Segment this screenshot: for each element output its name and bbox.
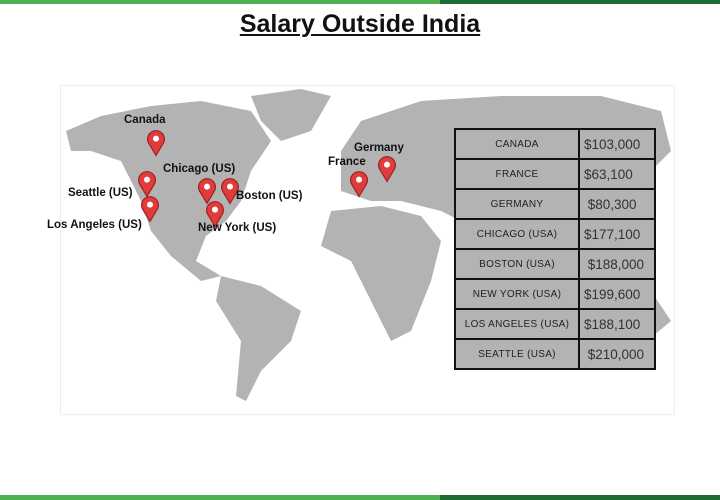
salary table: FRANCE [496, 168, 538, 180]
salary table: $188,000 [588, 256, 644, 272]
salary table: BOSTON (USA) [479, 258, 555, 270]
text: Seattle (US) [68, 187, 133, 199]
salary table: CHICAGO (USA) [477, 228, 557, 240]
text: Chicago (US) [163, 163, 235, 175]
salary table: $188,100 [584, 316, 640, 332]
map panel [60, 85, 675, 415]
salary table: $199,600 [584, 286, 640, 302]
salary table: $103,000 [584, 136, 640, 152]
text: France [328, 156, 366, 168]
map labels: Canada [124, 114, 166, 126]
text: New York (US) [198, 222, 276, 234]
salary table: $80,300 [588, 196, 637, 212]
salary table: GERMANY [491, 198, 543, 210]
salary table: CANADA [495, 138, 539, 150]
text: Boston (US) [236, 190, 302, 202]
salary table: NEW YORK (USA) [473, 288, 561, 300]
text: Los Angeles (US) [47, 219, 142, 231]
pins [139, 131, 395, 226]
bottom bar [0, 495, 720, 500]
salary table: $210,000 [588, 346, 644, 362]
salary table [454, 128, 656, 370]
top bar [0, 0, 720, 4]
text: Germany [354, 142, 404, 154]
salary table: $63,100 [584, 166, 633, 182]
title: Salary Outside India [240, 10, 480, 38]
salary table: LOS ANGELES (USA) [465, 318, 569, 330]
salary table: SEATTLE (USA) [478, 348, 556, 360]
salary table: $177,100 [584, 226, 640, 242]
